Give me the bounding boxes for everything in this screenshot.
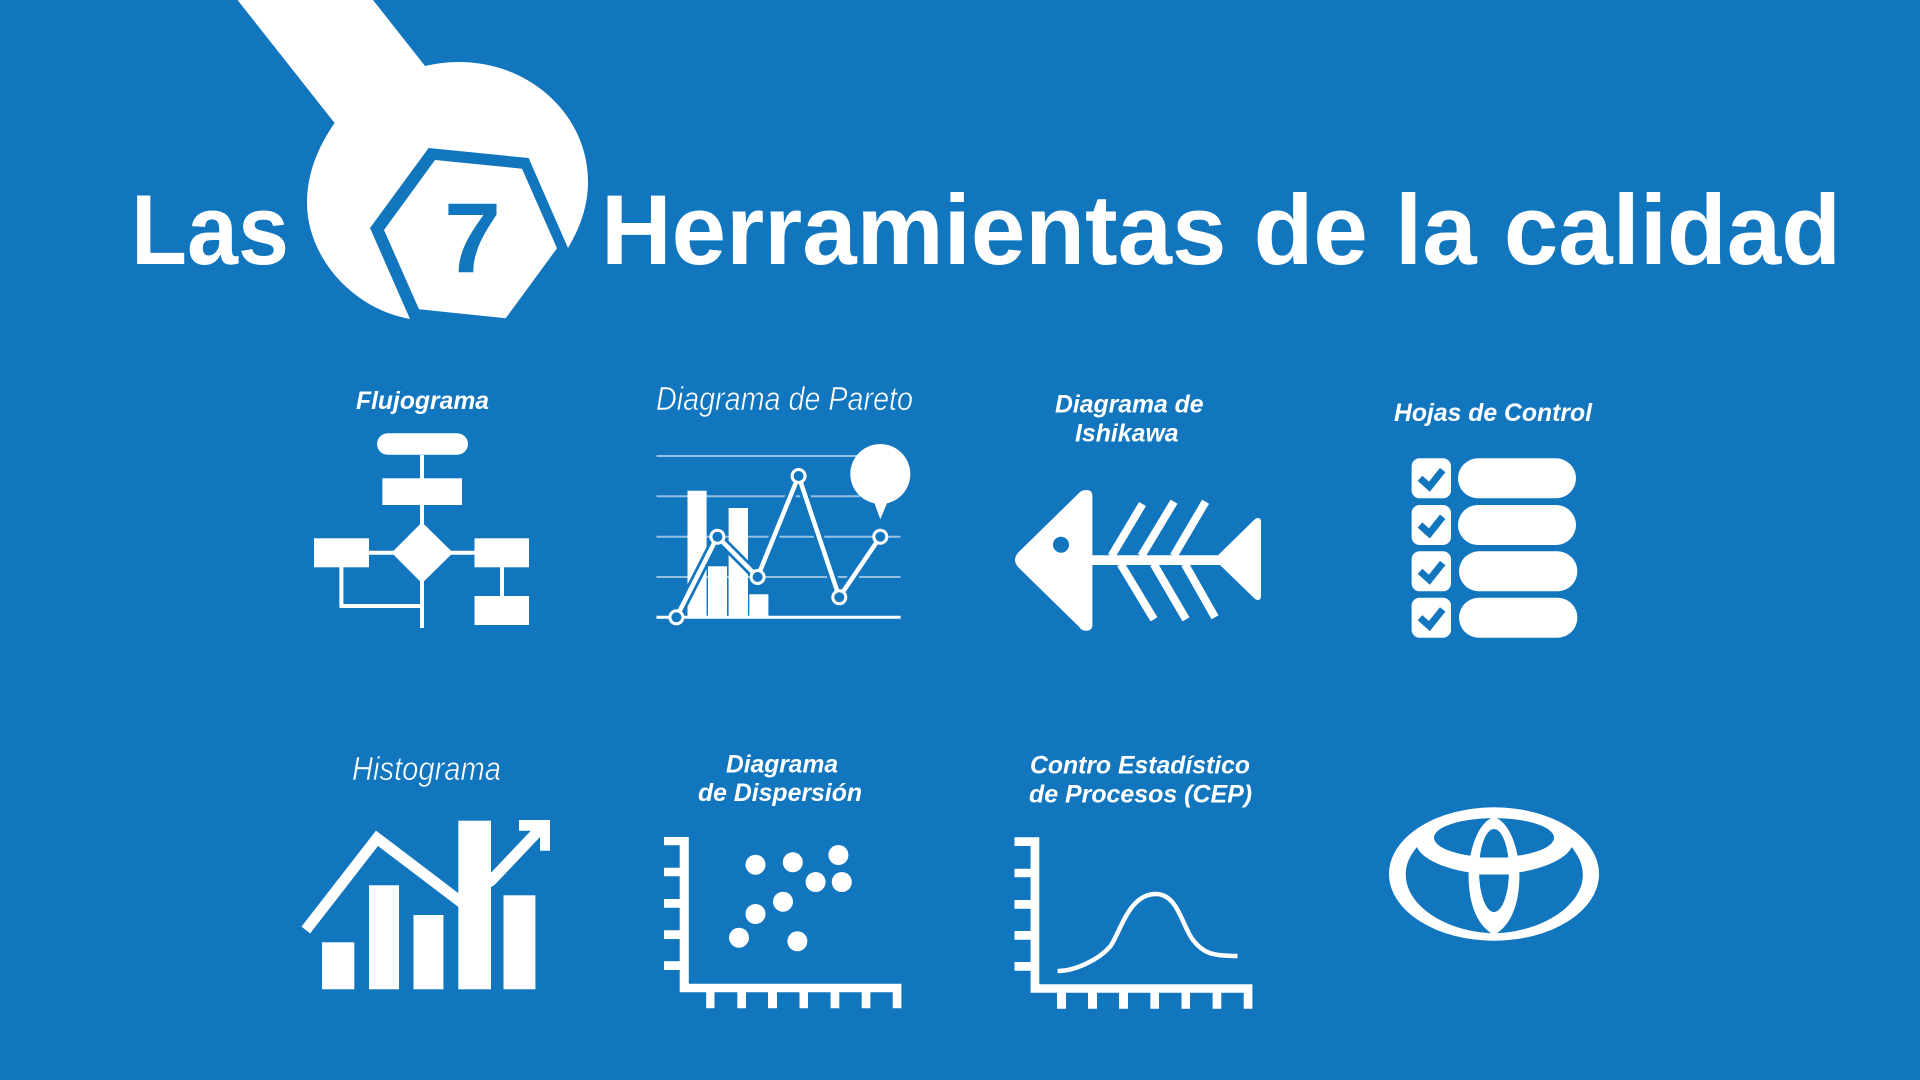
heading: Diagrama de Ishikawa: Ishikawa — [1075, 420, 1179, 448]
heading: Contro Estadístico de Procesos (CEP): Contro Estadístico — [1030, 751, 1250, 779]
heading: Diagrama de Pareto: Diagrama de Pareto — [656, 380, 913, 417]
panel: Histograma — [306, 750, 550, 989]
heading: Contro Estadístico de Procesos (CEP): de Procesos (CEP) — [1029, 780, 1252, 808]
heading: Flujograma: Flujograma — [356, 387, 489, 415]
chart: scatter plot — [664, 837, 901, 1008]
header: title with wrench — [131, 0, 1841, 319]
chart: histogram with arrow — [306, 820, 550, 989]
icon: checklist — [1412, 458, 1577, 638]
icon: Toyota logo — [1389, 807, 1599, 941]
heading: Diagrama de Dispersión: Diagrama — [726, 750, 838, 778]
title: Herramientas de la calidad: Herramientas de la calidad — [601, 174, 1841, 285]
icon: wrench — [238, 0, 588, 319]
panel: Diagrama de Ishikawa — [1015, 391, 1261, 631]
icon: fishbone — [1015, 490, 1261, 631]
icon: speech bubble — [850, 444, 910, 519]
heading: Diagrama de Dispersión: de Dispersión — [698, 779, 862, 807]
heading: Diagrama de Dispersión — [698, 750, 862, 807]
icon: flowchart — [314, 433, 529, 628]
panel: Control Estadístico de Procesos — [1014, 751, 1252, 1009]
panel: Diagrama de Dispersión — [664, 750, 901, 1008]
trend arrow — [306, 820, 550, 930]
icon: hexagon nut with number — [384, 160, 557, 318]
heading: Hojas de Control: Hojas de Control — [1394, 399, 1593, 427]
heading: Contro Estadístico de Procesos (CEP) — [1029, 751, 1252, 808]
title word: Las: Las — [131, 174, 289, 285]
panel: Flujograma — [314, 387, 529, 628]
heading: Diagrama de Ishikawa: Diagrama de — [1055, 391, 1204, 419]
number 7: 7 — [444, 182, 501, 293]
chart: Pareto — [656, 444, 910, 624]
chart: control curve — [1014, 837, 1252, 1009]
panel: Diagrama de Pareto — [656, 380, 913, 624]
heading: Histograma: Histograma — [352, 750, 501, 787]
panel: Hojas de Control — [1394, 399, 1593, 638]
heading: Diagrama de Ishikawa — [1055, 391, 1204, 448]
